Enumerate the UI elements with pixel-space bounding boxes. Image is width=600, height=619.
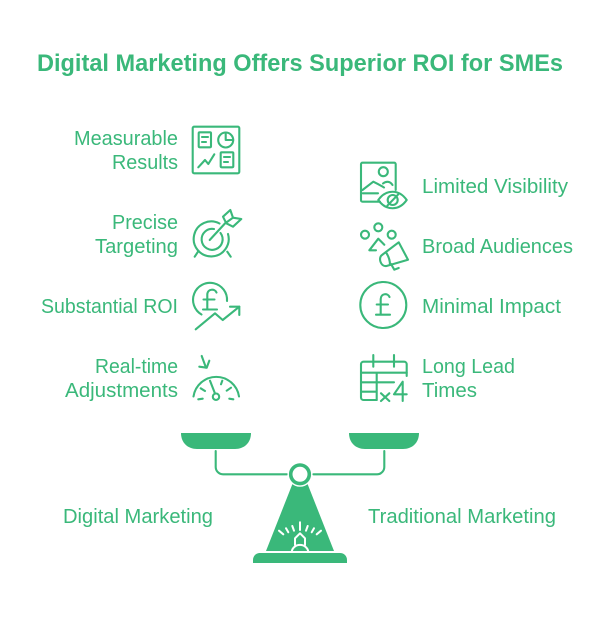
label: Broad Audiences: Broad Audiences <box>422 236 573 258</box>
label: Digital Marketing: Digital Marketing <box>63 506 213 528</box>
label: Long Lead Times: Long Lead <box>422 356 515 378</box>
right pan <box>349 433 419 449</box>
balance scale <box>181 433 419 563</box>
icon: audience with megaphone <box>361 223 408 270</box>
label: Real-time Adjustments <box>65 356 178 402</box>
label: Precise Targeting: Targeting <box>95 236 178 258</box>
label: Measurable Results: Results <box>112 152 178 174</box>
icon: pound with rising arrow <box>193 283 239 329</box>
label: Precise Targeting <box>95 212 178 258</box>
label: Substantial ROI: Substantial ROI <box>41 296 178 318</box>
icon: pound in circle <box>360 282 406 328</box>
icon: calendar times four <box>361 355 407 401</box>
label: Long Lead Times <box>422 356 515 402</box>
icon: image with crossed eye <box>361 163 407 208</box>
base <box>253 553 347 563</box>
icon: target with arrow <box>194 210 241 257</box>
label: Long Lead Times: Times <box>422 380 477 402</box>
label: Minimal Impact: Minimal Impact <box>422 296 561 318</box>
label: Real-time Adjustments: Adjustments <box>65 380 178 402</box>
label: Traditional Marketing: Traditional Marketing <box>368 506 556 528</box>
fulcrum triangle <box>266 462 334 551</box>
label: Real-time Adjustments: Real-time <box>95 356 178 378</box>
icon: dashboard <box>193 127 239 173</box>
icon: light on fulcrum <box>279 522 321 552</box>
left pan <box>181 433 251 449</box>
title: Digital Marketing Offers Superior ROI for SMEs <box>37 50 563 77</box>
label: Precise Targeting: Precise <box>112 212 178 234</box>
label: Measurable Results <box>74 128 178 174</box>
pivot ring <box>291 465 309 484</box>
label: Measurable Results: Measurable <box>74 128 178 150</box>
label: Limited Visibility: Limited Visibility <box>422 176 568 198</box>
beam <box>216 451 384 474</box>
icon: gauge with arrow <box>194 356 239 400</box>
